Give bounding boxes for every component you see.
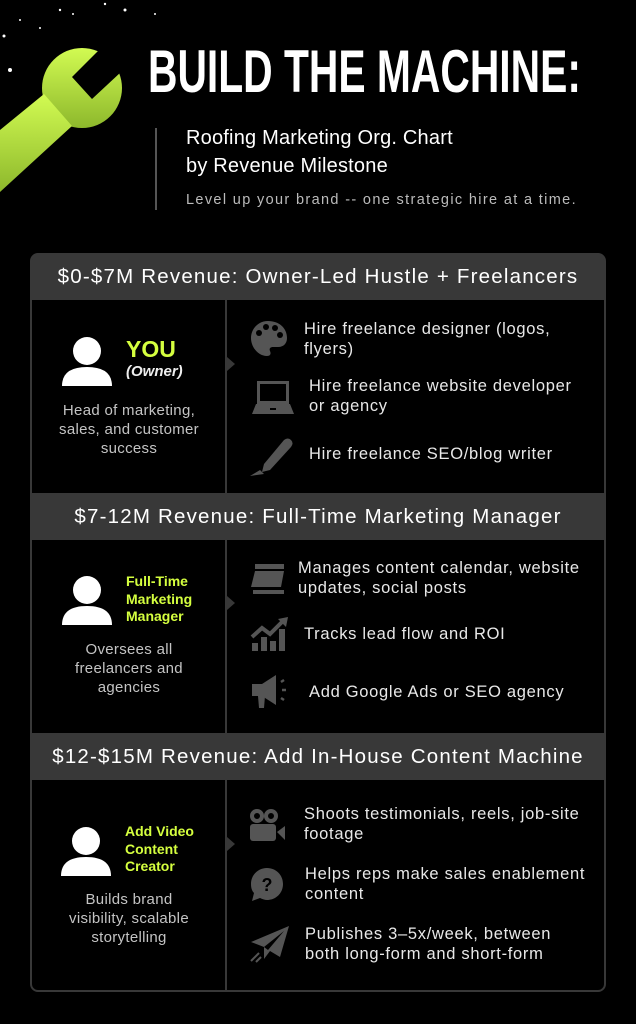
icon: paper plane: [250, 926, 289, 963]
item: [305, 925, 551, 963]
icon: calendar: [251, 564, 284, 594]
description: sales, and customer: [59, 421, 199, 438]
panel header 1: $0-$7M Revenue: Owner-Led Hustle + Freelancers: [58, 265, 578, 288]
icon: question bubble: ?: [262, 875, 272, 895]
title: BUILD THE MACHINE:: [148, 38, 581, 105]
item: [309, 377, 572, 415]
icon: question bubble: [251, 868, 283, 901]
item: Manages content calendar, website: [298, 559, 580, 577]
description: Head of marketing,: [63, 402, 195, 419]
description: [59, 402, 199, 457]
icon: person: [62, 337, 112, 386]
item: [298, 559, 580, 597]
description: freelancers and: [75, 660, 183, 677]
tagline: Level up your brand -- one strategic hire at a time.: [186, 192, 577, 208]
role: Marketing: [126, 590, 192, 606]
subtitle: [186, 127, 453, 177]
role: [126, 573, 192, 624]
icon: person: [61, 827, 111, 876]
arrow: [227, 837, 235, 851]
item: footage: [304, 825, 364, 843]
description: storytelling: [91, 929, 167, 946]
item: Add Google Ads or SEO agency: [309, 683, 564, 701]
item: flyers): [304, 340, 354, 358]
item: updates, social posts: [298, 579, 467, 597]
role: [125, 823, 194, 874]
icon: chart: [250, 617, 288, 651]
role: YOU: [126, 336, 176, 362]
role: Add Video: [125, 823, 194, 839]
role: Full-Time: [126, 573, 188, 589]
item: Hire freelance SEO/blog writer: [309, 445, 553, 463]
item: both long-form and short-form: [305, 945, 544, 963]
item: [304, 805, 580, 843]
role: Manager: [126, 608, 184, 624]
panel header 2: $7-12M Revenue: Full-Time Marketing Manager: [74, 505, 562, 528]
item: or agency: [309, 397, 388, 415]
panel header 2: [32, 493, 604, 540]
description: success: [101, 440, 157, 457]
icon: palette: [251, 321, 287, 356]
panel 3: [61, 823, 194, 946]
icon: video camera: [250, 809, 285, 841]
icon: person: [62, 576, 112, 625]
item: [305, 865, 585, 903]
item: Hire freelance website developer: [309, 377, 572, 395]
item: [304, 320, 550, 358]
subtitle: by Revenue Milestone: [186, 155, 388, 177]
speckles: [2, 2, 156, 72]
description: visibility, scalable: [69, 910, 189, 927]
description: Oversees all: [86, 641, 172, 658]
role: Content: [125, 840, 178, 856]
column divider: [225, 300, 227, 990]
item: Shoots testimonials, reels, job-site: [304, 805, 580, 823]
icon: laptop: [252, 381, 294, 414]
panel header 3: [32, 733, 604, 780]
arrow: [227, 357, 235, 371]
description: [69, 891, 189, 946]
divider line: [155, 128, 157, 210]
panel 1: (Owner): [126, 363, 183, 380]
description: Builds brand: [86, 891, 172, 908]
icon: pen: [250, 438, 292, 476]
panel header 3: $12-$15M Revenue: Add In-House Content Machine: [52, 745, 584, 768]
panel 2: [62, 573, 192, 696]
item: Hire freelance designer (logos,: [304, 320, 550, 338]
item: content: [305, 885, 364, 903]
role: Creator: [125, 858, 175, 874]
description: agencies: [98, 679, 160, 696]
panel header 1: [32, 253, 604, 300]
panel 1: [59, 336, 199, 457]
item: Publishes 3–5x/week, between: [305, 925, 551, 943]
description: [75, 641, 183, 696]
chart frame: [30, 253, 606, 992]
item: Helps reps make sales enablement: [305, 865, 585, 883]
icon: wrench: [0, 48, 122, 192]
icon: megaphone: [252, 675, 286, 708]
arrow: [227, 596, 235, 610]
item: Tracks lead flow and ROI: [304, 625, 505, 643]
subtitle: Roofing Marketing Org. Chart: [186, 127, 453, 149]
